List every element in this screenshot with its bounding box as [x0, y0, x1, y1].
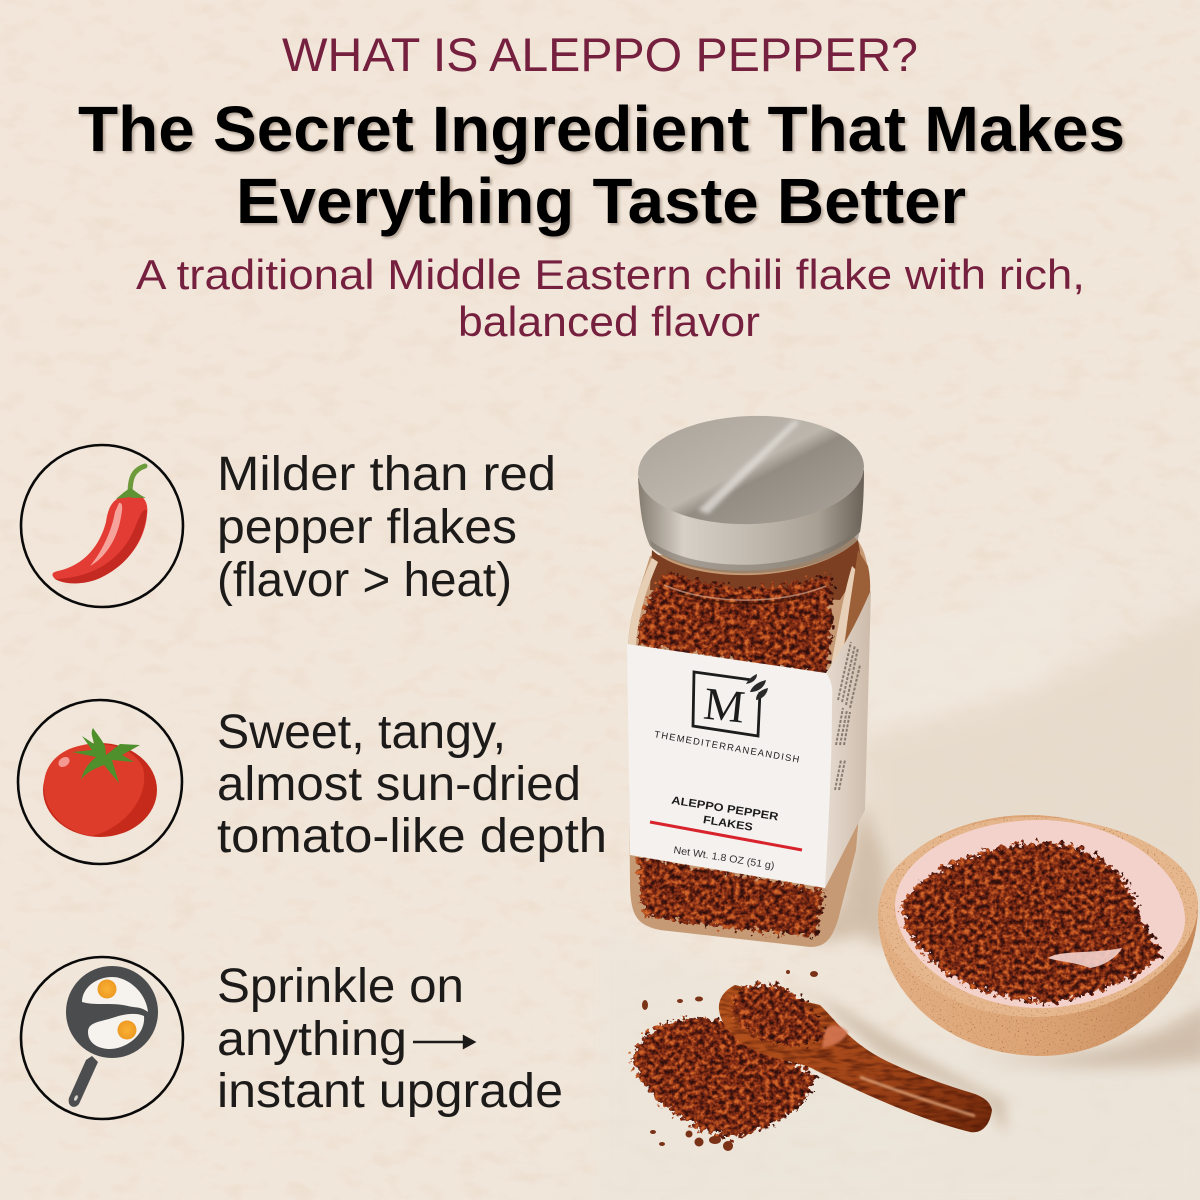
- jar flakes bottom: [638, 856, 824, 936]
- spoon shadow: [790, 984, 1006, 1135]
- net weight: Net Wt. 1.8 OZ (51 g): [673, 845, 775, 872]
- jar flakes top: [636, 572, 832, 676]
- heading: what is aleppo pepper: WHAT IS ALEPPO PEPPER?: [282, 28, 918, 81]
- text: sweet, tangy: almost sun-dried: [217, 758, 581, 811]
- text: sprinkle on anything: instant upgrade: [217, 1065, 563, 1118]
- title: Everything Taste Better: [236, 165, 966, 237]
- subtitle: balanced flavor: [458, 298, 760, 345]
- product name: ALEPPO PEPPER: [671, 795, 779, 823]
- flake pile: [632, 970, 818, 1151]
- title: The Secret Ingredient That Makes: [78, 93, 1125, 165]
- text: sweet, tangy: Sweet, tangy,: [217, 706, 506, 759]
- spoon: [719, 984, 1006, 1135]
- text: sprinkle on anything: [217, 960, 563, 1118]
- neck reflections: [664, 585, 826, 600]
- subtitle: [136, 251, 1085, 345]
- icon: chili pepper: [21, 445, 183, 607]
- arrow: [413, 1036, 474, 1048]
- text: sprinkle on anything: anything: [217, 1013, 407, 1066]
- logo: M: [701, 678, 747, 733]
- icon: frying pan with eggs: [21, 957, 183, 1119]
- glass neck: [650, 540, 862, 600]
- bowl flakes: [902, 842, 1162, 1003]
- bowl rim: [880, 817, 1198, 1017]
- text: milder than red pepper flakes: (flavor > heat): [217, 554, 512, 607]
- title: [78, 93, 1125, 237]
- label front: [627, 644, 832, 888]
- subtitle: A traditional Middle Eastern chili flake with rich,: [136, 251, 1085, 298]
- icon: tomato: [18, 700, 182, 864]
- bowl reflection: [1048, 948, 1122, 968]
- text: milder than red pepper flakes: pepper flakes: [217, 501, 517, 554]
- text: milder than red pepper flakes: [217, 448, 556, 607]
- text: milder than red pepper flakes: Milder than red: [217, 448, 556, 501]
- spoon flakes: [731, 984, 824, 1046]
- crumbs: [642, 970, 818, 1151]
- lid: [636, 412, 866, 573]
- jar: [627, 412, 871, 947]
- label side text: [835, 642, 860, 790]
- bowl shadow: [960, 1000, 1200, 1067]
- red line: [650, 822, 802, 850]
- bowl: [878, 815, 1200, 1067]
- jar glass: [628, 535, 870, 947]
- product name: FLAKES: [702, 814, 753, 834]
- brand text: THEMEDITERRANEANDISH: [654, 728, 800, 765]
- logo: [693, 672, 768, 736]
- jar shadow: [810, 800, 890, 950]
- bowl inner: [895, 820, 1185, 1008]
- text: sweet, tangy: [217, 706, 607, 863]
- text: sweet, tangy: tomato-like depth: [217, 810, 607, 863]
- text: sprinkle on anything: Sprinkle on: [217, 960, 464, 1013]
- glass highlight left: [628, 558, 658, 645]
- label side: [825, 590, 871, 888]
- product name: [671, 795, 779, 834]
- glass highlight right: [830, 566, 858, 670]
